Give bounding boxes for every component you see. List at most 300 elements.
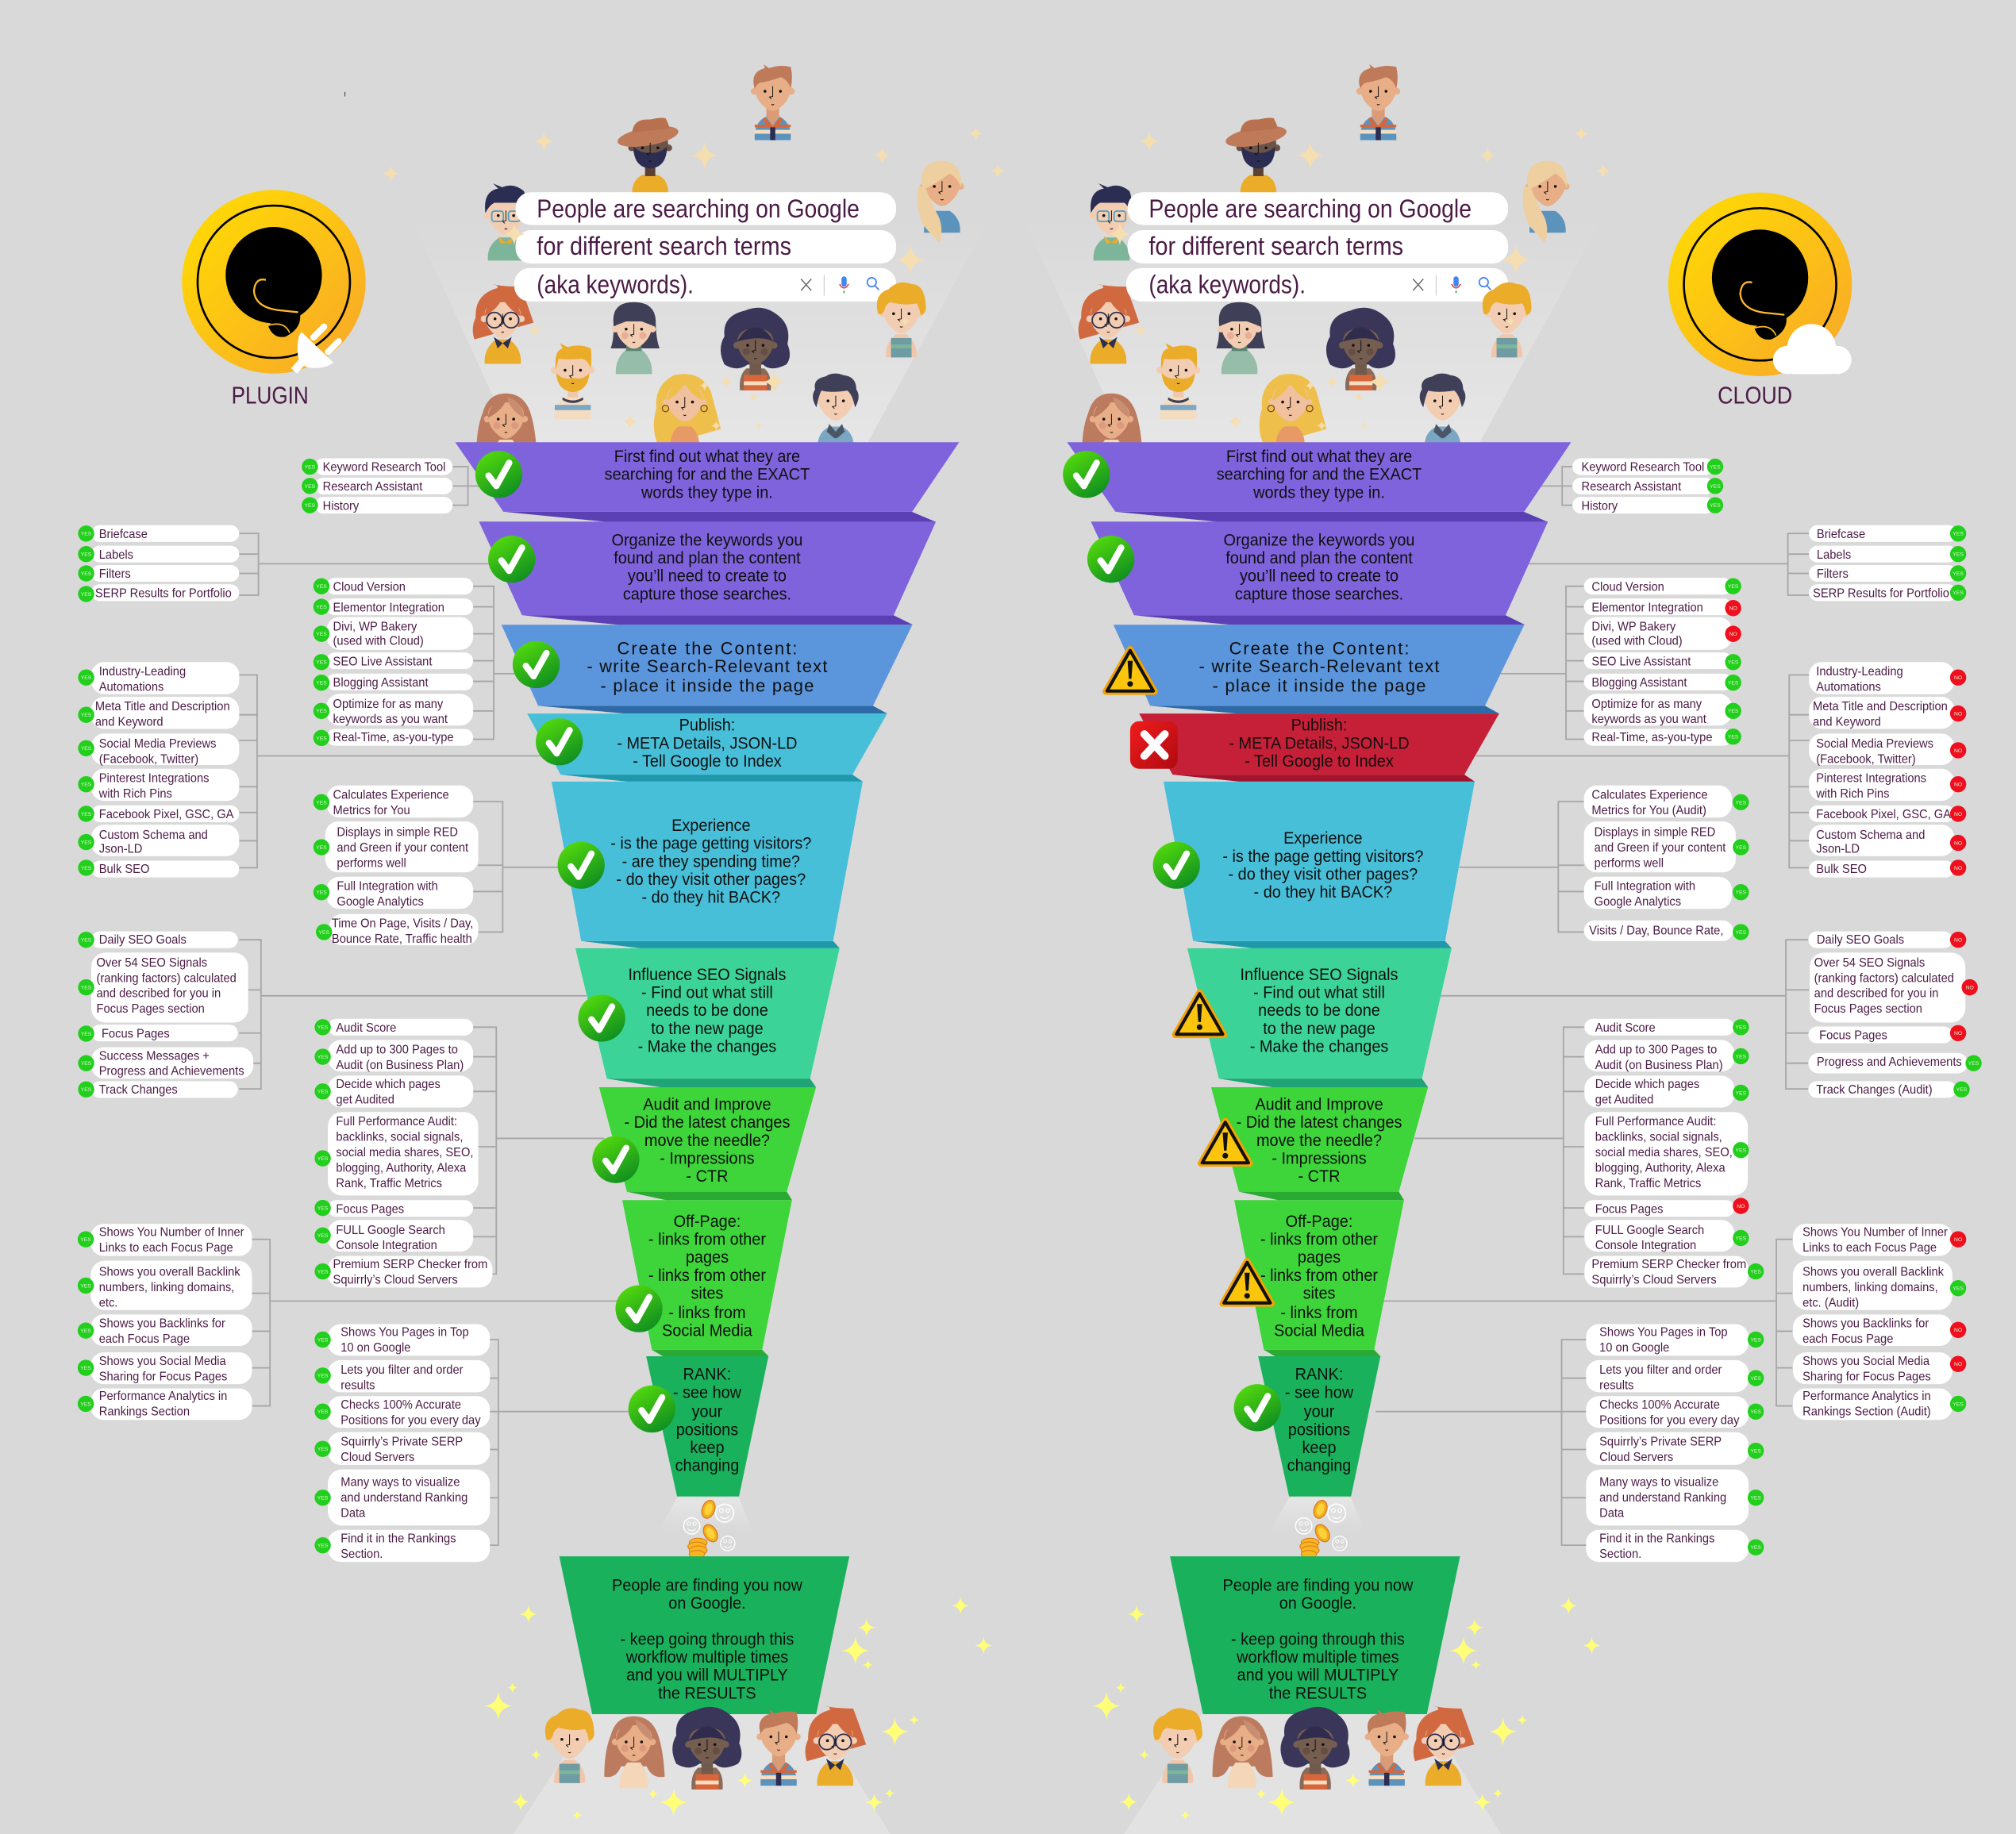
item: and described for you in bbox=[1814, 986, 1938, 1001]
item bbox=[1572, 478, 1723, 494]
item bbox=[302, 459, 452, 475]
list: plugin create content bbox=[314, 578, 473, 746]
item: YES bbox=[1953, 590, 1964, 596]
item: YES bbox=[317, 1156, 329, 1162]
item: Automations bbox=[1816, 680, 1881, 694]
item bbox=[1809, 859, 1966, 878]
item bbox=[1584, 1040, 1749, 1072]
funnel: influence SEO signals: Influence SEO Signals bbox=[1241, 965, 1398, 984]
item: Positions for you every day bbox=[1599, 1413, 1740, 1428]
search box: People are searching on Google bbox=[537, 194, 860, 223]
item: YES bbox=[1736, 1025, 1747, 1031]
item bbox=[1793, 1389, 1966, 1420]
item bbox=[1584, 1220, 1749, 1252]
funnel: audit and improve: - Did the latest changes bbox=[1237, 1113, 1402, 1132]
funnel: off-page: sites bbox=[1303, 1284, 1335, 1303]
funnel: organize keywords: capture those searches. bbox=[623, 585, 791, 604]
item bbox=[1793, 1224, 1966, 1256]
item: Labels bbox=[99, 548, 133, 562]
item: Premium SERP Checker from bbox=[1591, 1257, 1746, 1271]
item: Track Changes bbox=[99, 1083, 178, 1097]
item: performs well bbox=[1595, 856, 1664, 871]
item: 10 on Google bbox=[1599, 1341, 1669, 1355]
connectors: cloud side bbox=[1375, 467, 1809, 1545]
item: YES bbox=[316, 890, 327, 896]
item bbox=[78, 1224, 252, 1256]
item bbox=[302, 478, 452, 494]
item: Real-Time, as-you-type bbox=[1591, 730, 1712, 744]
item: Audit (on Business Plan) bbox=[1595, 1058, 1723, 1072]
item: SERP Results for Portfolio bbox=[1813, 586, 1949, 601]
item: SERP Results for Portfolio bbox=[95, 586, 232, 601]
funnel: rank: RANK: bbox=[683, 1365, 731, 1384]
item: Metrics for You bbox=[333, 804, 410, 817]
item: Data bbox=[340, 1506, 366, 1520]
item bbox=[314, 1530, 490, 1562]
item bbox=[314, 1200, 473, 1217]
item: YES bbox=[317, 1374, 329, 1379]
item: YES bbox=[1953, 1401, 1964, 1407]
item: YES bbox=[80, 1328, 91, 1334]
item: Custom Schema and bbox=[1816, 828, 1925, 842]
item: Focus Pages bbox=[336, 1202, 405, 1217]
item: YES bbox=[81, 1032, 92, 1037]
funnel: rank: your bbox=[692, 1402, 722, 1421]
coins and smileys falling bbox=[1270, 1498, 1364, 1558]
item: Full Performance Audit: bbox=[1595, 1115, 1716, 1128]
funnel: off-page bbox=[1234, 1200, 1404, 1356]
funnel: create content: - write Search-Relevant text bbox=[587, 656, 827, 676]
item: and Green if your content bbox=[1595, 841, 1726, 855]
item: YES bbox=[1750, 1449, 1761, 1455]
item bbox=[78, 1314, 252, 1346]
item: Audit Score bbox=[336, 1021, 396, 1035]
item: Optimize for as many bbox=[333, 697, 444, 711]
item: Section. bbox=[1599, 1548, 1641, 1561]
item: History bbox=[1581, 499, 1618, 513]
item bbox=[78, 697, 239, 729]
item: numbers, linking domains, bbox=[99, 1281, 234, 1294]
funnel: publish (red): Publish: bbox=[1291, 716, 1347, 735]
item: NO bbox=[1954, 812, 1962, 817]
item: with Rich Pins bbox=[1815, 787, 1890, 801]
item bbox=[314, 1256, 492, 1287]
list: plugin off-page bbox=[78, 1224, 252, 1420]
item: YES bbox=[317, 1409, 329, 1415]
item: YES bbox=[1728, 660, 1739, 666]
item: YES bbox=[1736, 1236, 1747, 1241]
item: Google Analytics bbox=[337, 895, 424, 909]
item: each Focus Page bbox=[99, 1332, 190, 1346]
item: Daily SEO Goals bbox=[1817, 933, 1904, 947]
funnel: off-page: pages bbox=[1298, 1248, 1341, 1267]
item: Facebook Pixel, GSC, GA bbox=[1816, 808, 1952, 821]
item: and Keyword bbox=[1813, 715, 1881, 729]
item: YES bbox=[316, 605, 327, 610]
funnel: final results: on Google. bbox=[1279, 1594, 1356, 1613]
item bbox=[1572, 459, 1723, 475]
item bbox=[78, 1352, 252, 1384]
funnel: publish: - META Details, JSON-LD bbox=[617, 734, 798, 752]
item: and understand Ranking bbox=[1599, 1490, 1726, 1505]
item: Shows you Backlinks for bbox=[1802, 1317, 1929, 1331]
item: Sharing for Focus Pages bbox=[99, 1370, 228, 1384]
item: YES bbox=[1750, 1409, 1761, 1415]
item: and Keyword bbox=[95, 715, 164, 729]
item: YES bbox=[1736, 1148, 1747, 1154]
funnel: experience: - is the page getting visitors? bbox=[1222, 847, 1423, 866]
item: YES bbox=[80, 1237, 91, 1243]
list: plugin keyword research bbox=[302, 459, 452, 513]
item bbox=[1584, 1112, 1749, 1196]
panel: plugin funnel bbox=[455, 442, 993, 1834]
item bbox=[78, 733, 239, 766]
funnel: organize keywords: Organize the keywords you bbox=[1224, 531, 1414, 549]
funnel: rank: positions bbox=[676, 1421, 738, 1439]
item: Focus Pages bbox=[1595, 1202, 1664, 1217]
item: YES bbox=[81, 1061, 92, 1067]
item: Rankings Section bbox=[99, 1405, 190, 1419]
item bbox=[78, 769, 239, 801]
item bbox=[1809, 733, 1966, 766]
funnel: audit and improve: - CTR bbox=[686, 1167, 728, 1186]
item: YES bbox=[1736, 845, 1747, 851]
item: Data bbox=[1599, 1506, 1625, 1520]
funnel: influence SEO signals: to the new page bbox=[1263, 1019, 1375, 1038]
item bbox=[1584, 921, 1749, 941]
item: Squirrly’s Cloud Servers bbox=[1591, 1273, 1717, 1286]
item: YES bbox=[1750, 1496, 1761, 1501]
item: (ranking factors) calculated bbox=[1814, 971, 1954, 985]
item: YES bbox=[1953, 532, 1964, 537]
item: YES bbox=[1728, 735, 1739, 740]
list: plugin organize bbox=[78, 525, 239, 602]
funnel: off-page: sites bbox=[691, 1284, 723, 1303]
item: Briefcase bbox=[1817, 528, 1865, 541]
item: Pinterest Integrations bbox=[99, 771, 210, 786]
item: Squirrly’s Cloud Servers bbox=[333, 1273, 458, 1286]
funnel: influence SEO signals: needs to be done bbox=[646, 1002, 768, 1020]
item bbox=[1809, 769, 1966, 801]
stray tick mark bbox=[344, 92, 346, 97]
item: (ranking factors) calculated bbox=[96, 971, 237, 985]
item bbox=[314, 1019, 473, 1036]
item: etc. bbox=[99, 1296, 117, 1310]
funnel: audit and improve: Audit and Improve bbox=[1255, 1095, 1383, 1114]
item: Section. bbox=[340, 1548, 383, 1561]
sparkles: yellow bbox=[484, 1597, 993, 1821]
item bbox=[1584, 617, 1741, 650]
funnel: off-page: - links from bbox=[1280, 1303, 1358, 1322]
funnel: audit and improve: Audit and Improve bbox=[643, 1095, 771, 1114]
funnel: final results: on Google. bbox=[668, 1594, 746, 1613]
item bbox=[314, 1396, 490, 1428]
funnel: organize keywords: found and plan the content bbox=[1225, 549, 1413, 567]
item: NO bbox=[1729, 606, 1737, 612]
item: YES bbox=[1953, 1286, 1964, 1292]
item: YES bbox=[81, 782, 92, 788]
funnel: experience bbox=[1164, 782, 1475, 948]
funnel: experience: Experience bbox=[1283, 829, 1363, 848]
item bbox=[78, 1048, 253, 1078]
item: Focus Pages bbox=[102, 1027, 170, 1040]
funnel: experience: Experience bbox=[671, 816, 751, 835]
item: Over 54 SEO Signals bbox=[96, 956, 207, 970]
item: Elementor Integration bbox=[333, 601, 444, 614]
item: YES bbox=[1736, 890, 1747, 896]
search box bbox=[1126, 192, 1508, 302]
item: Shows you Social Media bbox=[99, 1355, 226, 1368]
item: Shows You Number of Inner bbox=[1802, 1225, 1948, 1240]
item: Decide which pages bbox=[1595, 1078, 1700, 1091]
item: YES bbox=[1750, 1376, 1761, 1382]
item: YES bbox=[80, 1366, 91, 1371]
person: blond boy bbox=[877, 283, 926, 357]
item: YES bbox=[1953, 552, 1964, 558]
item: Meta Title and Description bbox=[95, 699, 230, 713]
funnel: off-page bbox=[622, 1200, 792, 1356]
funnel: off-page: - links from bbox=[668, 1303, 746, 1322]
item: YES bbox=[318, 930, 329, 936]
funnel: find keywords: words they type in. bbox=[641, 483, 773, 502]
item bbox=[314, 1220, 473, 1252]
item bbox=[1793, 1314, 1966, 1346]
funnel: experience: - are they spending time? bbox=[622, 852, 800, 871]
item bbox=[1793, 1352, 1966, 1384]
item: social media shares, SEO, bbox=[1595, 1146, 1733, 1159]
item: NO bbox=[1954, 1031, 1962, 1036]
item: Many ways to visualize bbox=[340, 1475, 460, 1490]
item bbox=[1586, 1530, 1764, 1562]
connectors: plugin side bbox=[239, 467, 637, 1545]
funnel: organize keywords bbox=[1091, 521, 1548, 625]
funnel: create content: - place it inside the page bbox=[600, 676, 814, 696]
item bbox=[1584, 1256, 1764, 1287]
funnel: off-page: - links from other bbox=[1260, 1266, 1378, 1285]
item: YES bbox=[317, 1337, 329, 1343]
funnel: find keywords: words they type in. bbox=[1252, 483, 1385, 502]
item bbox=[1584, 598, 1741, 616]
item bbox=[1808, 1053, 1982, 1074]
funnel: audit and improve: - CTR bbox=[1298, 1167, 1341, 1186]
people crowd bbox=[473, 64, 964, 465]
funnel: rank: changing bbox=[675, 1456, 739, 1475]
funnel: rank bbox=[646, 1356, 768, 1497]
item: YES bbox=[1750, 1270, 1761, 1275]
item: YES bbox=[1728, 681, 1739, 686]
item: numbers, linking domains, bbox=[1802, 1281, 1938, 1294]
search box: (aka keywords). bbox=[1148, 270, 1306, 298]
funnel: experience bbox=[552, 782, 863, 948]
funnel: final results bbox=[1170, 1556, 1460, 1714]
item bbox=[1809, 525, 1966, 542]
item: Automations bbox=[99, 680, 164, 694]
list: plugin rank bbox=[314, 1325, 490, 1562]
item bbox=[314, 786, 473, 817]
item: etc. (Audit) bbox=[1802, 1296, 1859, 1310]
funnel: publish: Publish: bbox=[679, 716, 735, 735]
item: Performance Analytics in bbox=[1802, 1390, 1931, 1403]
list: cloud experience bbox=[1584, 786, 1749, 941]
item: YES bbox=[1710, 503, 1721, 509]
item: YES bbox=[80, 1401, 91, 1407]
funnel: rank: keep bbox=[1302, 1438, 1337, 1457]
item: NO bbox=[1954, 712, 1962, 717]
funnel: rank: - see how bbox=[673, 1383, 741, 1401]
panel: cloud funnel bbox=[1063, 442, 1601, 1834]
item: Full Integration with bbox=[1595, 879, 1695, 894]
item: blogging, Authority, Alexa bbox=[336, 1161, 467, 1175]
item: NO bbox=[1737, 1204, 1745, 1209]
list: cloud publish bbox=[1809, 662, 1966, 878]
item bbox=[1808, 932, 1966, 948]
item: YES bbox=[317, 1270, 329, 1275]
item bbox=[1584, 729, 1741, 746]
item: Labels bbox=[1817, 548, 1852, 562]
item bbox=[1809, 565, 1966, 582]
funnel: create content bbox=[502, 625, 912, 713]
item: YES bbox=[305, 503, 316, 509]
item: YES bbox=[1736, 1090, 1747, 1096]
item: backlinks, social signals, bbox=[1595, 1130, 1722, 1144]
item: YES bbox=[317, 1447, 329, 1452]
item: Links to each Focus Page bbox=[99, 1240, 233, 1255]
item bbox=[1584, 694, 1741, 726]
item: YES bbox=[81, 592, 92, 598]
funnel: audit and improve: move the needle? bbox=[1256, 1131, 1382, 1150]
item: Elementor Integration bbox=[1591, 601, 1703, 614]
funnel: influence SEO signals: - Make the changes bbox=[638, 1037, 776, 1056]
funnel: audit and improve: - Did the latest changes bbox=[625, 1113, 790, 1132]
item: get Audited bbox=[1595, 1093, 1653, 1107]
item: Performance Analytics in bbox=[99, 1390, 227, 1403]
item bbox=[78, 546, 239, 563]
funnel: influence SEO signals: Influence SEO Signals bbox=[628, 965, 786, 984]
item: YES bbox=[317, 1544, 329, 1549]
funnel: audit and improve: - Impressions bbox=[660, 1149, 755, 1168]
funnel: influence SEO signals bbox=[575, 948, 840, 1087]
item: Daily SEO Goals bbox=[99, 933, 187, 947]
item: with Rich Pins bbox=[98, 787, 172, 801]
item: keywords as you want bbox=[333, 713, 448, 726]
item bbox=[314, 617, 473, 650]
item: Facebook Pixel, GSC, GA bbox=[99, 808, 234, 821]
funnel: influence SEO signals: - Find out what still bbox=[641, 983, 773, 1002]
item: YES bbox=[81, 840, 92, 845]
funnel: audit and improve bbox=[1211, 1087, 1428, 1200]
item: Progress and Achievements bbox=[99, 1064, 244, 1078]
item bbox=[1586, 1470, 1764, 1525]
funnel: rank: your bbox=[1304, 1402, 1335, 1421]
item: YES bbox=[317, 1496, 329, 1501]
item: Rank, Traffic Metrics bbox=[1595, 1176, 1702, 1190]
funnel: find keywords: First find out what they are bbox=[1226, 448, 1412, 466]
item: Social Media Previews bbox=[1816, 736, 1933, 751]
item bbox=[1810, 952, 1978, 1022]
item: SEO Live Assistant bbox=[333, 655, 433, 668]
item: Focus Pages section bbox=[1814, 1002, 1922, 1016]
logo: plugin bbox=[182, 190, 366, 374]
list: plugin publish bbox=[78, 662, 239, 878]
item: YES bbox=[305, 464, 316, 470]
item: (Facebook, Twitter) bbox=[99, 752, 198, 766]
item bbox=[314, 674, 473, 690]
item bbox=[1809, 546, 1966, 563]
item bbox=[314, 729, 473, 746]
item bbox=[78, 859, 239, 878]
item bbox=[1809, 697, 1966, 729]
funnel: final results: - keep going through this bbox=[1231, 1630, 1405, 1649]
funnel: final results: and you will MULTIPLY bbox=[1237, 1666, 1399, 1685]
item bbox=[78, 952, 248, 1022]
item: Json-LD bbox=[1816, 842, 1860, 856]
item: YES bbox=[80, 1283, 91, 1289]
item bbox=[78, 1260, 252, 1310]
item bbox=[1584, 1075, 1749, 1108]
item: performs well bbox=[337, 856, 406, 871]
item: Full Performance Audit: bbox=[336, 1115, 457, 1128]
item bbox=[314, 578, 473, 594]
item: NO bbox=[1954, 1328, 1962, 1333]
item: NO bbox=[1954, 840, 1962, 846]
funnel: organize keywords: capture those searches. bbox=[1235, 585, 1403, 604]
item: NO bbox=[1954, 782, 1962, 788]
search box bbox=[514, 192, 896, 302]
item: Full Integration with bbox=[337, 879, 438, 894]
item: NO bbox=[1966, 986, 1974, 991]
people: results bbox=[545, 1706, 866, 1790]
item: YES bbox=[1710, 484, 1721, 490]
item: Filters bbox=[1817, 567, 1849, 581]
item bbox=[314, 821, 479, 872]
item bbox=[78, 525, 239, 542]
item: and described for you in bbox=[96, 986, 221, 1001]
item: YES bbox=[81, 866, 92, 871]
item: YES bbox=[1968, 1061, 1979, 1067]
coins and smileys falling bbox=[658, 1498, 752, 1558]
funnel: final results: People are finding you now bbox=[612, 1576, 802, 1594]
list: cloud audit bbox=[1584, 1019, 1764, 1287]
item: Lets you filter and order bbox=[340, 1363, 464, 1377]
funnel: organize keywords: you’ll need to create to bbox=[1240, 567, 1399, 586]
item bbox=[1586, 1360, 1764, 1393]
item bbox=[78, 932, 238, 948]
item: Add up to 300 Pages to bbox=[1595, 1043, 1717, 1057]
item bbox=[314, 1325, 490, 1355]
item bbox=[78, 1081, 238, 1098]
funnel: publish (red): - Tell Google to Index bbox=[1245, 752, 1395, 771]
item: YES bbox=[81, 938, 92, 944]
item: YES bbox=[316, 681, 327, 686]
item: NO bbox=[1954, 1237, 1962, 1243]
sparkles: gold bbox=[1108, 126, 1611, 431]
item: Focus Pages section bbox=[96, 1002, 205, 1016]
item: Optimize for as many bbox=[1591, 697, 1702, 711]
item: Rankings Section (Audit) bbox=[1802, 1405, 1931, 1419]
item: YES bbox=[316, 800, 327, 805]
item: results bbox=[340, 1378, 375, 1393]
list: plugin experience bbox=[314, 786, 479, 946]
item: NO bbox=[1954, 938, 1962, 944]
funnel: final results: and you will MULTIPLY bbox=[626, 1666, 788, 1685]
item: Research Assistant bbox=[1581, 480, 1682, 494]
light beam bbox=[411, 218, 990, 442]
funnel: influence SEO signals: needs to be done bbox=[1258, 1002, 1380, 1020]
funnel: find keywords bbox=[1068, 442, 1572, 522]
item bbox=[1584, 877, 1749, 909]
people crowd bbox=[1079, 64, 1570, 465]
item: Industry-Leading bbox=[99, 665, 186, 679]
